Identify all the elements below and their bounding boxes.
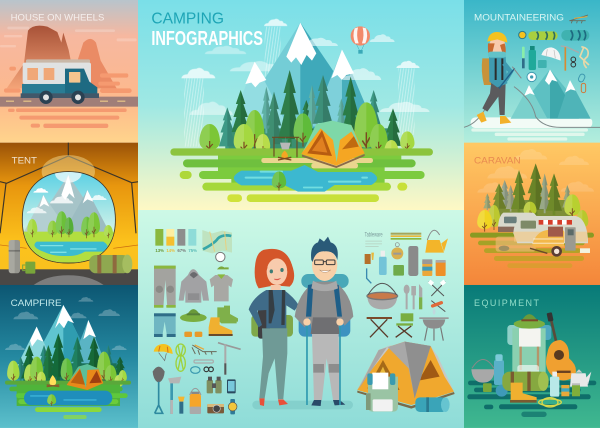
bar chart (155, 229, 197, 253)
label: tent: TENT (12, 156, 38, 166)
label: campfire: CAMPFIRE (11, 298, 62, 308)
panel: caravan (464, 143, 600, 285)
title: INFOGRAPHICS (151, 27, 263, 50)
cutlery (404, 284, 422, 309)
campfire with pot (272, 137, 299, 160)
camera (207, 404, 224, 413)
title (151, 10, 263, 50)
ground shadow (252, 401, 353, 409)
hot air balloon (351, 26, 370, 54)
ice axe (218, 343, 241, 375)
thermos (494, 354, 504, 385)
sun hat (180, 309, 207, 322)
backpack (507, 325, 551, 378)
label: mountaineering: MOUNTAINEERING (474, 13, 564, 23)
tent floor (0, 269, 139, 285)
panel: equipment (464, 285, 600, 428)
ground stripes (5, 381, 131, 419)
pine forest (219, 70, 401, 152)
mountaineer (477, 32, 521, 124)
marshmallow and sausage skewers (428, 280, 446, 312)
phone (227, 379, 236, 393)
round trees (199, 102, 415, 161)
boot (510, 383, 537, 403)
mountains (511, 69, 591, 119)
tent window view (22, 171, 116, 264)
rope (464, 87, 600, 127)
guitar (546, 312, 576, 380)
mesa rock formations (0, 26, 137, 93)
rain columns (184, 27, 415, 147)
label: equipment: EQUIPMENT (474, 298, 539, 308)
lake (24, 391, 112, 406)
kettle (425, 230, 448, 253)
flashlight (178, 397, 185, 414)
cup (483, 383, 492, 392)
sleeping roll (502, 372, 549, 391)
dome tent (301, 121, 365, 168)
cup (23, 262, 35, 274)
crampons (192, 345, 217, 355)
bar chart: 13% (155, 248, 164, 253)
lake (234, 165, 377, 192)
panel: campfire (0, 285, 139, 428)
hatchet (168, 377, 181, 414)
clouds (5, 297, 127, 350)
forest (477, 163, 588, 232)
bar chart: 14% (166, 248, 175, 253)
ground stripes (170, 148, 433, 202)
forest (7, 333, 127, 388)
bottle and cans (550, 372, 580, 397)
front caravan (499, 216, 590, 257)
clouds (477, 149, 594, 193)
road (0, 97, 139, 107)
clouds (181, 19, 430, 115)
grill (419, 308, 449, 341)
ground stripes (470, 233, 594, 268)
pants (154, 266, 176, 308)
sleeping roll (89, 255, 132, 273)
campfire (47, 375, 59, 387)
large tent (357, 342, 455, 409)
map and compass (202, 230, 232, 262)
title: CAMPING (151, 10, 224, 27)
shovel (153, 367, 165, 413)
panel: mountaineering (464, 0, 600, 143)
carabiners (191, 360, 213, 373)
canteen (496, 385, 508, 397)
panel: tent interior (0, 143, 139, 285)
panel: gear and hikers (138, 210, 465, 428)
rope (176, 344, 185, 371)
small tree on lake (272, 171, 286, 191)
camper van (21, 59, 99, 104)
woman hiker (249, 249, 299, 406)
bar chart: 67% (177, 248, 186, 253)
label: house on wheels: HOUSE ON WHEELS (11, 13, 104, 23)
rear caravan (498, 213, 539, 232)
folding table (367, 318, 392, 337)
sunlight glow (42, 155, 95, 188)
folding chair (396, 313, 413, 337)
snowy ground (471, 117, 592, 141)
mountains (228, 23, 378, 137)
clouds over mountains (301, 38, 381, 80)
cooking pot (367, 283, 398, 309)
sleeping mat roll (415, 397, 450, 412)
small supplies (365, 243, 446, 283)
label: caravan: CARAVAN (474, 155, 521, 165)
ground stripes (467, 381, 596, 417)
sunglasses (184, 332, 202, 337)
panel: house on wheels (0, 0, 139, 143)
gear icons (519, 15, 589, 93)
cooking pot (471, 359, 495, 383)
binoculars (207, 377, 222, 393)
backpack (366, 373, 398, 412)
green hat (514, 314, 545, 329)
road reflection stripes (8, 108, 127, 128)
watch (228, 399, 237, 414)
helmet (154, 344, 173, 361)
bar chart: 75% (188, 248, 197, 253)
hoodie (179, 269, 209, 303)
rope (539, 398, 561, 407)
lantern (190, 388, 201, 414)
thermos (9, 240, 20, 273)
tableware heading: Tableware (365, 232, 383, 239)
shorts (154, 313, 176, 337)
tent seams (0, 143, 139, 248)
tent (67, 364, 103, 390)
mountains (17, 305, 107, 380)
boots (209, 306, 238, 336)
kettle (570, 369, 591, 387)
tableware heading (365, 232, 421, 247)
man hiker (295, 237, 353, 406)
cap and polo (210, 266, 233, 301)
panel: central camping scene (138, 0, 465, 211)
